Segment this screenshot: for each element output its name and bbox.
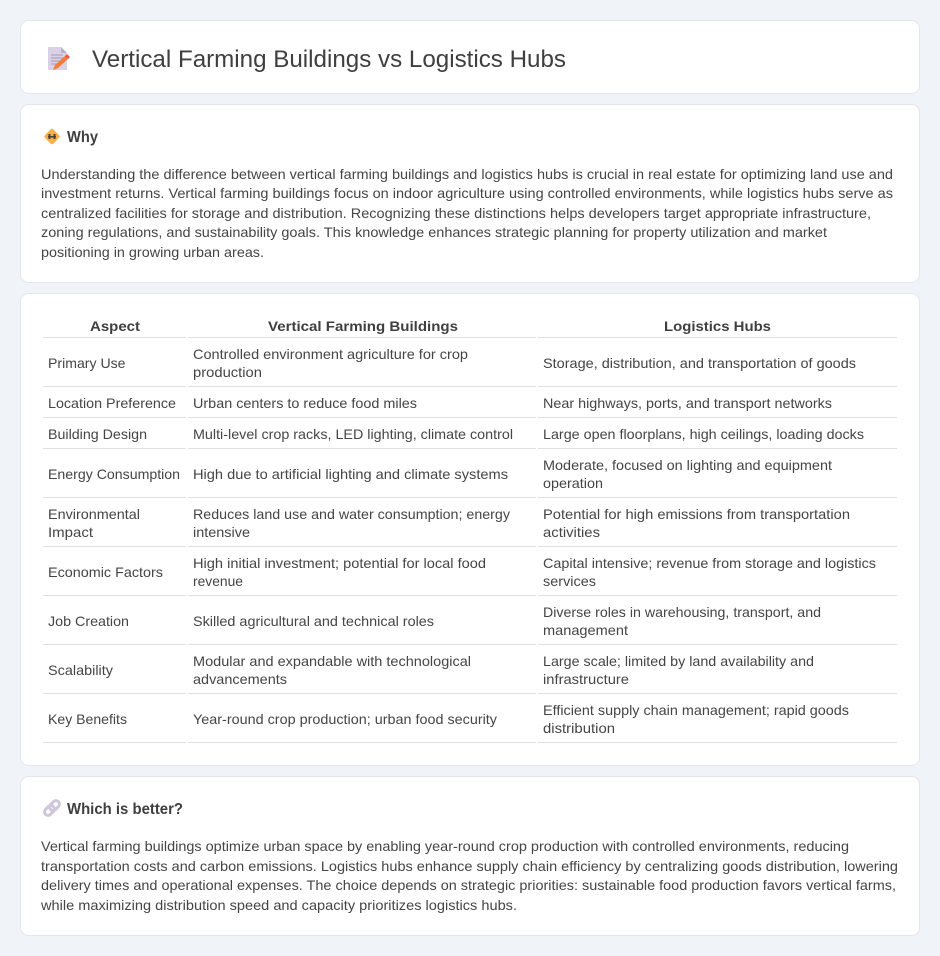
table header: [90, 318, 771, 334]
row: scalability: Modular and expandable with technological: [193, 653, 471, 669]
row: economic factors: High initial investment; potential for local food: [193, 555, 486, 571]
row: primary use: Controlled environment agriculture for crop: [193, 346, 468, 362]
row: environmental impact: Impact: [48, 524, 93, 540]
text block: which is better paragraph: transportation costs and carbon emissions. Logistics hubs enhance supply chain efficiency by centralizing goods distribution, lowering: [41, 858, 898, 874]
row: economic factors: Capital intensive; revenue from storage and logistics: [543, 555, 876, 571]
row: environmental impact: activities: [543, 524, 600, 540]
row: primary use: [48, 346, 856, 380]
row: job creation: Diverse roles in warehousing, transport, and: [543, 604, 821, 620]
row: key benefits: [48, 702, 849, 736]
text block: which is better paragraph: while maximizing distribution speed and capacity prioritizes logistics hubs.: [40, 897, 517, 913]
row: key benefits: distribution: [543, 720, 615, 736]
row: primary use: production: [193, 364, 262, 380]
row: energy consumption: operation: [543, 475, 603, 491]
row: scalability: Large scale; limited by land availability and: [543, 653, 814, 669]
row: energy consumption: Energy Consumption: [48, 466, 180, 482]
row: building design: [48, 426, 864, 442]
panel: title card: [20, 20, 920, 94]
row: environmental impact: Potential for high emissions from transportation: [543, 506, 850, 522]
row: scalability: [48, 653, 814, 687]
title: Vertical Farming Buildings vs Logistics Hubs: [92, 46, 566, 73]
row: energy consumption: High due to artificial lighting and climate systems: [193, 466, 508, 482]
row: key benefits: Key Benefits: [48, 711, 127, 727]
row: location preference: Location Preference: [48, 395, 176, 411]
panel: why: [20, 104, 920, 282]
row: environmental impact: Reduces land use and water consumption; energy: [193, 506, 510, 522]
row: location preference: [48, 395, 832, 411]
row: building design: Multi-level crop racks, LED lighting, climate control: [193, 426, 513, 442]
row: economic factors: Economic Factors: [48, 564, 163, 580]
text block: why paragraph: positioning in growing urban areas.: [41, 244, 264, 260]
row: building design: Large open floorplans, high ceilings, loading docks: [543, 426, 864, 442]
text block: which is better paragraph: delivery times and operational expenses. The choice depends on strategic priorities: sustainable food production favors vertical farms,: [41, 877, 896, 893]
text block: why paragraph: Understanding the difference between vertical farming buildings and logistics hubs is crucial in real estate for optimizing land use and: [41, 166, 893, 182]
row: location preference: Near highways, ports, and transport networks: [543, 395, 832, 411]
row: scalability: advancements: [193, 671, 287, 687]
row: economic factors: services: [543, 573, 596, 589]
row: job creation: Job Creation: [48, 613, 129, 629]
row: key benefits: Year-round crop production; urban food security: [193, 711, 497, 727]
row: economic factors: [48, 555, 876, 589]
row: energy consumption: [48, 457, 832, 491]
text block: which is better paragraph: Vertical farming buildings optimize urban space by enabling year-round crop production with controlled environments, reducing: [41, 838, 849, 854]
row: key benefits: Efficient supply chain management; rapid goods: [543, 702, 849, 718]
icon: chain link: [43, 799, 61, 817]
panel: which is better: [20, 776, 920, 936]
row: environmental impact: intensive: [193, 524, 250, 540]
table header: Aspect: [90, 318, 140, 334]
row: environmental impact: [48, 506, 850, 540]
row: job creation: Skilled agricultural and technical roles: [193, 613, 434, 629]
icon: warning diamond: [44, 128, 60, 145]
heading: which is better: Which is better?: [67, 801, 183, 818]
text block: why paragraph: [41, 166, 893, 260]
panel: comparison table: [20, 294, 920, 766]
text block: why paragraph: centralized facilities for storage and distribution. Recognizing these distinctions helps developers target appropriate infrastructure,: [41, 205, 871, 221]
row: primary use: Primary Use: [48, 355, 126, 371]
row: scalability: Scalability: [48, 662, 113, 678]
table header: Vertical Farming Buildings: [268, 318, 458, 334]
text block: which is better paragraph: [40, 838, 898, 913]
row: job creation: [48, 604, 821, 638]
table header: Logistics Hubs: [664, 318, 771, 334]
text block: why paragraph: zoning regulations, and sustainability goals. This knowledge enhances strategic planning for property utilization and market: [41, 224, 827, 240]
icon: document with pencil: [48, 47, 70, 70]
row: primary use: Storage, distribution, and transportation of goods: [543, 355, 856, 371]
row: location preference: Urban centers to reduce food miles: [193, 395, 417, 411]
row: environmental impact: Environmental: [48, 506, 140, 522]
row: building design: Building Design: [48, 426, 147, 442]
heading: why: Why: [67, 129, 98, 146]
text block: why paragraph: investment returns. Vertical farming buildings focus on indoor agriculture using controlled environments, while logistics hubs serve as: [41, 185, 893, 201]
row: economic factors: revenue: [193, 573, 243, 589]
row: energy consumption: Moderate, focused on lighting and equipment: [543, 457, 832, 473]
row: scalability: infrastructure: [543, 671, 629, 687]
row: job creation: management: [543, 622, 628, 638]
